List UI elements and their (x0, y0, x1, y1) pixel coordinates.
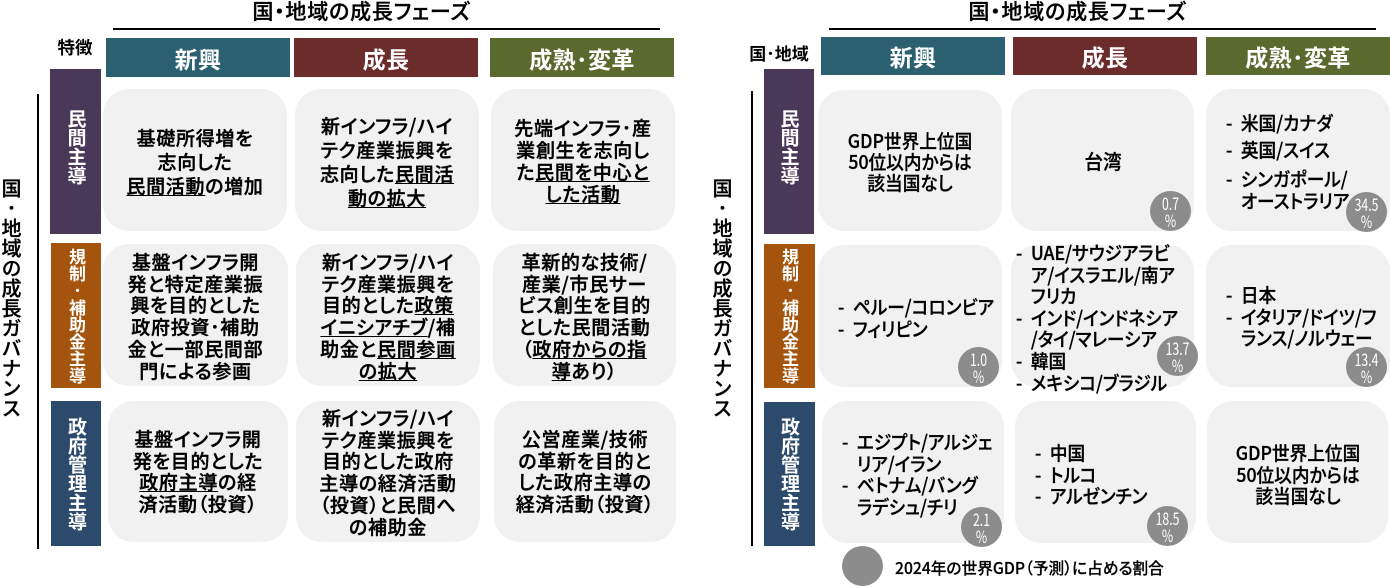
badge: 1.0 percent: 1.0 (970, 346, 987, 371)
text: no applicable country: 該当国なし (867, 169, 953, 196)
header: right growth: 成長 (1082, 39, 1128, 73)
list: private mature countries: オーストラリア (1241, 187, 1349, 214)
row label: regulation and subsidy led: 規制･補助金主導 (65, 248, 90, 384)
card: private emerging countries (818, 90, 1002, 231)
header: right mature: 成熟･変革 (1245, 39, 1351, 73)
card: government emerging: 済活動（投資） (139, 490, 257, 517)
card: regulation mature (493, 244, 676, 386)
row label: right regulation led: 規制･補助金主導 (778, 248, 803, 384)
card: regulation mature: とした民間活動 (519, 313, 650, 340)
card: regulation emerging: 政府投資･補助 (131, 313, 260, 340)
card: private growth (295, 89, 479, 231)
list: regulation mature countries: 日本 (1241, 281, 1276, 308)
card: regulation mature countries (1206, 245, 1390, 387)
badge: 18.5 percent: 18.5 (1156, 505, 1179, 530)
card: private growth countries (1011, 89, 1194, 231)
card: government growth countries (1015, 401, 1196, 543)
list: regulation emerging countries: フィリピン (853, 315, 928, 342)
card: government emerging countries (822, 401, 1004, 543)
card: regulation growth (296, 244, 480, 386)
list: regulation growth countries (1016, 239, 1178, 396)
list: regulation growth countries: フリカ (1031, 282, 1076, 309)
card: private emerging: 志向した (158, 148, 232, 175)
card: government growth (296, 401, 480, 542)
row label: regulation and subsidy led (51, 243, 101, 388)
header: mature: 成熟･変革 (529, 40, 635, 74)
list: government emerging countries: エジプト/アルジェ (857, 428, 992, 455)
header: right emerging (821, 37, 1005, 75)
card: government emerging: 政府主導の経 (139, 468, 257, 495)
row label: private led: 民間主導 (64, 109, 90, 185)
card: private emerging: 基礎所得増を (137, 124, 253, 151)
card: private mature (491, 89, 675, 231)
header: emerging: 新興 (175, 40, 221, 74)
list: government growth countries: 中国 (1050, 439, 1085, 466)
badge: 34.5 percent (1346, 192, 1387, 232)
card: private mature: 先端インフラ･産 (514, 114, 652, 141)
header: growth: 成長 (363, 40, 409, 74)
card: regulation growth: 目的とした政策 (322, 291, 454, 318)
card: government growth: 目的とした政府 (322, 447, 454, 474)
card: government growth: テク産業振興を (322, 426, 454, 453)
text: no applicable country: GDP世界上位国 (848, 127, 972, 154)
badge: 2.1 percent: 2.1 (973, 506, 990, 531)
card: government growth: 新インフラ/ハイ (322, 404, 454, 431)
card: regulation growth countries (1011, 245, 1194, 387)
card: private mature countries (1206, 89, 1390, 231)
text: Taiwan: 台湾 (1084, 146, 1122, 175)
card: government mature: の革新を目的と (518, 447, 652, 474)
list: regulation growth countries: 韓国 (1031, 347, 1066, 374)
legend: share of world GDP: 2024年の世界GDP（予測）に占める割合 (895, 555, 1164, 579)
badge: 18.5 percent (1147, 506, 1188, 546)
list: regulation mature countries: イタリア/ドイツ/フ (1241, 303, 1376, 330)
list: regulation emerging countries (838, 293, 994, 342)
list: government emerging countries: リア/イラン (857, 450, 941, 477)
card: regulation emerging: 基盤インフラ開 (132, 248, 259, 275)
row label: right private led (764, 69, 814, 234)
text: no applicable country (848, 127, 972, 196)
list: regulation growth countries: ア/イスラエル/南ア (1031, 261, 1175, 288)
badge: 1.0 percent (958, 347, 999, 387)
row label: government led (51, 401, 101, 546)
list: government emerging countries: ベトナム/バング (857, 471, 978, 498)
card: regulation emerging (103, 244, 288, 386)
badge: 13.7 percent: % (1172, 352, 1183, 377)
label: country and region: 国･地域 (749, 40, 809, 65)
list: private mature countries (1226, 109, 1349, 214)
row label: private led (50, 69, 101, 234)
badge: 13.4 percent (1346, 347, 1387, 387)
header: right emerging: 新興 (890, 39, 936, 73)
badge: 13.7 percent: 13.7 (1166, 335, 1189, 360)
badge: 18.5 percent: % (1162, 522, 1173, 547)
card: private growth: 新インフラ/ハイ (321, 112, 453, 139)
card: regulation emerging countries (818, 245, 1002, 387)
card: government mature countries (1207, 401, 1388, 543)
card: regulation emerging: 金と一部民間部 (128, 335, 263, 362)
card: private growth: 志向した民間活 (320, 160, 454, 187)
list: regulation growth countries: メキシコ/ブラジル (1031, 369, 1167, 396)
list: government emerging countries: ラデシュ/チリ (857, 493, 957, 520)
badge: 1.0 percent: % (973, 363, 984, 388)
badge: 34.5 percent: % (1361, 208, 1372, 233)
header: emerging (106, 38, 290, 77)
text: no applicable country: 50位以内からは (848, 148, 972, 175)
card: government growth: 主導の経済活動 (319, 469, 457, 496)
text: no applicable country: 50位以内からは (1236, 461, 1360, 488)
header: right mature (1206, 37, 1390, 75)
legend: share of world GDP (842, 546, 1164, 586)
card: regulation growth: 新インフラ/ハイ (322, 248, 454, 275)
card: regulation growth: テク産業振興を (322, 270, 454, 297)
row label: right regulation led (764, 244, 815, 388)
card: government emerging: 発を目的とした (133, 447, 263, 474)
badge: 0.7 percent (1150, 191, 1191, 231)
card: private growth: テク産業振興を (321, 136, 453, 163)
card: regulation emerging: 発と特定産業振 (128, 270, 263, 297)
card: government emerging (108, 401, 288, 542)
badge: 13.4 percent: 13.4 (1355, 346, 1378, 371)
card: regulation mature: （政府からの指 (522, 335, 647, 362)
card: regulation mature: 産業/市民サー (522, 270, 647, 297)
card: government mature: 経済活動（投資） (516, 490, 654, 517)
card: regulation emerging: 門による参画 (139, 357, 252, 384)
text: no applicable country (1236, 439, 1360, 509)
header: growth (294, 38, 478, 77)
vertical heading: right governance: 国･地域の成長ガバナンス (708, 178, 737, 418)
badge: 0.7 percent: % (1165, 207, 1176, 232)
card: government mature: 公営産業/技術 (522, 425, 648, 452)
card: private emerging (103, 89, 287, 231)
card: government growth: の補助金 (349, 513, 427, 540)
card: regulation growth: 助金と民間参画 (320, 335, 456, 362)
card: private emerging: 民間活動の増加 (126, 172, 264, 199)
header: mature (490, 38, 674, 77)
badge: 13.4 percent: % (1361, 363, 1372, 388)
row label: right government led (764, 402, 815, 546)
badge: 34.5 percent: 34.5 (1355, 191, 1378, 216)
card: government mature (494, 401, 676, 542)
header: right growth (1013, 37, 1197, 75)
card: government growth: （投資）と民間へ (320, 491, 456, 518)
card: private growth: 動の拡大 (348, 184, 426, 211)
list: regulation growth countries: UAE/サウジアラビ (1031, 239, 1170, 266)
row label: government led: 政府管理主導 (64, 416, 91, 530)
badge: 0.7 percent: 0.7 (1162, 190, 1179, 215)
card: regulation growth: イニシアチブ/補 (320, 313, 456, 340)
card: private mature: した活動 (546, 180, 620, 207)
card: private mature: た民間を中心と (516, 158, 650, 185)
card: regulation mature: ビス創生を目的 (518, 291, 651, 318)
badge: 2.1 percent: % (976, 523, 987, 548)
list: government growth countries (1036, 439, 1148, 509)
list: regulation growth countries: /タイ/マレーシア (1031, 325, 1157, 352)
badge: 2.1 percent (961, 507, 1002, 547)
list: government growth countries: アルゼンチン (1050, 482, 1147, 509)
text: no applicable country: GDP世界上位国 (1236, 439, 1360, 466)
row label: right private led: 民間主導 (776, 109, 804, 185)
label: features: 特徴 (58, 35, 92, 60)
list: regulation mature countries (1226, 281, 1376, 351)
list: government growth countries: トルコ (1050, 461, 1096, 488)
list: government emerging countries (842, 428, 992, 520)
text: no applicable country: 該当国なし (1255, 482, 1341, 509)
list: regulation emerging countries: ペルー/コロンビア (853, 293, 994, 320)
card: regulation growth: の拡大 (359, 357, 417, 384)
row label: right government led: 政府管理主導 (777, 417, 804, 531)
list: private mature countries: 英国/スイス (1241, 136, 1330, 163)
card: regulation mature: 革新的な技術/ (522, 248, 647, 275)
list: regulation mature countries: ランス/ノルウェー (1241, 324, 1373, 351)
card: regulation mature: 導あり） (552, 357, 617, 384)
card: government emerging: 基盤インフラ開 (134, 425, 262, 452)
card: private mature: 業創生を志向し (516, 136, 650, 163)
card: government mature: した政府主導の (518, 468, 652, 495)
list: private mature countries: 米国/カナダ (1241, 109, 1332, 136)
list: private mature countries: シンガポール/ (1241, 165, 1348, 192)
card: regulation emerging: 興を目的とした (130, 291, 261, 318)
list: regulation growth countries: インド/インドネシア (1031, 304, 1178, 331)
badge: 13.7 percent (1157, 336, 1198, 376)
